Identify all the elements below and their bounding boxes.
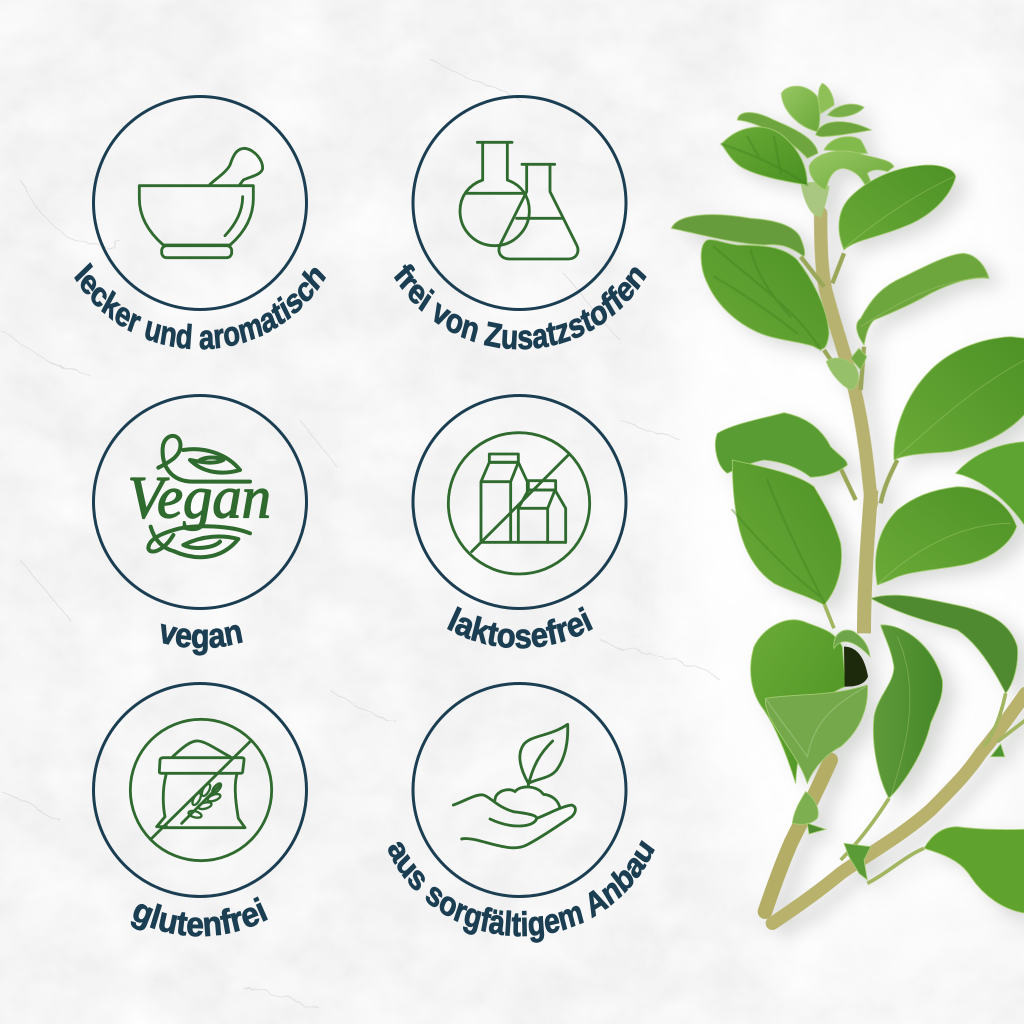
icon: hand holding seedling — [453, 724, 575, 848]
icon: crossed-out grain sack — [130, 719, 272, 861]
badge: vegan — [92, 394, 308, 656]
plant: oregano sprig photo illustration — [671, 83, 1024, 923]
upper sprig — [671, 83, 1024, 527]
label: frei von Zusatzstoffen: frei von Zusatzstoffen — [394, 264, 647, 350]
badge ring — [413, 396, 626, 608]
label: vegan: vegan — [160, 624, 243, 656]
badge: lecker und aromatisch — [74, 95, 326, 350]
badge ring — [94, 96, 306, 310]
label: aus sorgfältigem Anbau: aus sorgfältigem Anbau — [388, 840, 655, 943]
leaf flourishes — [148, 436, 250, 557]
icon: crossed-out milk cartons — [448, 433, 590, 574]
Vegan lettering: Vegan — [128, 465, 271, 532]
label: lecker und aromatisch: lecker und aromatisch — [74, 262, 326, 350]
icon: Vegan script logo with leaves — [128, 436, 271, 557]
badge ring — [413, 684, 626, 896]
label: laktosefrei: laktosefrei — [447, 606, 593, 649]
badge: glutenfrei — [92, 682, 308, 937]
badge: aus sorgfältigem Anbau — [388, 682, 655, 943]
label: glutenfrei: glutenfrei — [130, 896, 268, 937]
badge: frei von Zusatzstoffen — [394, 95, 647, 350]
badge ring — [413, 96, 626, 310]
lower sprig — [732, 460, 1024, 923]
icon: mortar and pestle — [139, 148, 263, 258]
badge ring — [94, 396, 306, 608]
badge ring — [94, 684, 306, 896]
badge: laktosefrei — [412, 394, 628, 649]
icon: laboratory flasks — [460, 142, 578, 259]
